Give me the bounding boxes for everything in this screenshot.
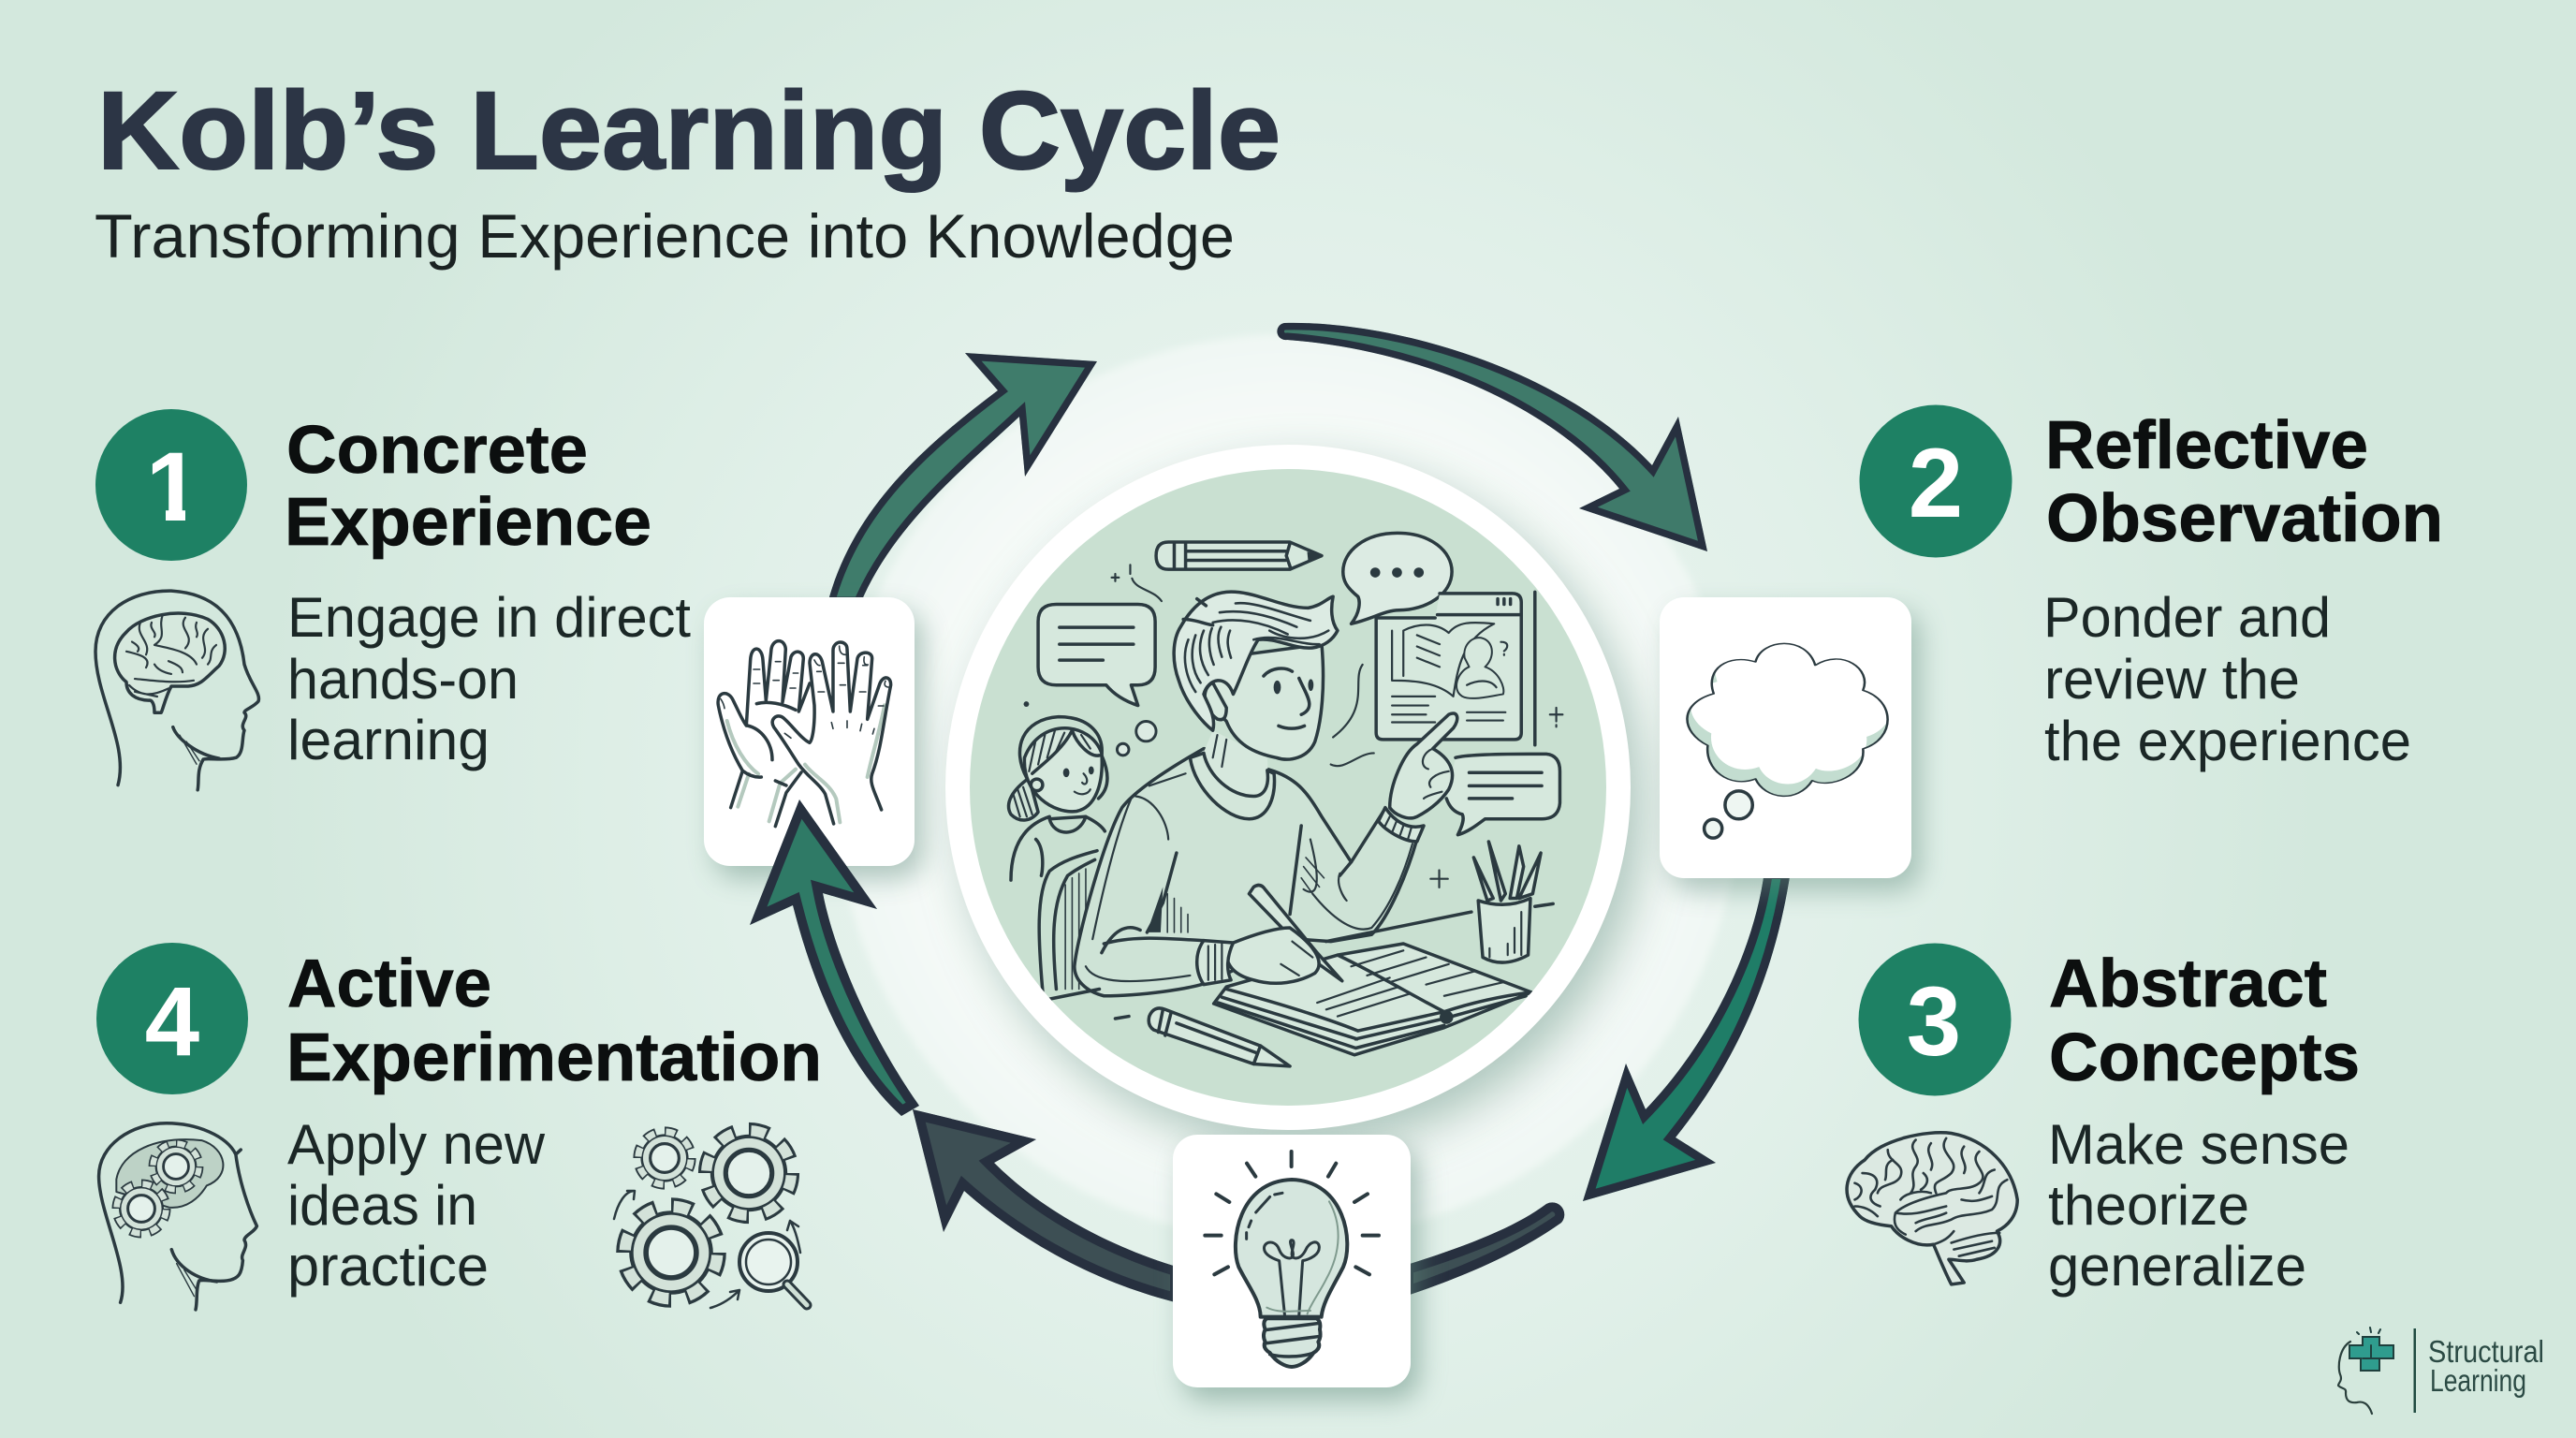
number badge 1: 1 [146, 433, 200, 542]
icon: gears and magnifier [614, 1131, 807, 1308]
speech bubble top [1343, 533, 1452, 624]
description 4: practice [287, 1235, 489, 1298]
icon: head with gears [99, 1123, 256, 1310]
arrow: experience up to concrete [827, 353, 1097, 604]
thought dots [1024, 701, 1156, 756]
step 4: active experimentation [96, 943, 822, 1310]
description 3: Make sense [2048, 1113, 2349, 1176]
logo divider [2413, 1328, 2416, 1413]
description 3: generalize [2048, 1235, 2306, 1298]
heading 4 [286, 946, 822, 1095]
icon: hands [718, 641, 891, 827]
heading 2 [2045, 408, 2443, 556]
icon: light bulb [1205, 1152, 1379, 1367]
description 2: review the [2044, 648, 2300, 711]
pencil bottom [1149, 1008, 1290, 1066]
collar [1190, 753, 1274, 819]
description 2 [2043, 586, 2411, 772]
number badge 2: 2 [1909, 429, 1963, 538]
step 3: abstract concepts [1847, 944, 2360, 1298]
arrow: reflective to abstract top arc [1277, 323, 1707, 551]
icon: head with brain [95, 591, 258, 790]
description 1 [287, 586, 691, 771]
step 1: concrete experience [95, 409, 691, 790]
heading 4: Active [287, 946, 491, 1021]
heading 1: Concrete [286, 413, 588, 488]
arrow: up into hands card base [913, 1109, 1179, 1303]
pencil top [1156, 542, 1322, 569]
green disc [970, 469, 1606, 1106]
speech bubble right [1446, 754, 1559, 835]
writing hand and pencil [1197, 885, 1342, 985]
number badge 2 [1859, 404, 2012, 558]
description 4 [287, 1113, 546, 1298]
central illustration [945, 445, 1631, 1130]
icon: thought cloud [1687, 632, 1891, 838]
pointing hand [1390, 713, 1457, 818]
heading 3: Abstract [2049, 946, 2327, 1021]
heading 1 [285, 413, 651, 560]
step 2: reflective observation [1859, 404, 2443, 772]
subtitle: Transforming Experience into Knowledge [95, 201, 1235, 271]
number badge 3: 3 [1907, 967, 1961, 1077]
description 4: Apply new [287, 1113, 546, 1176]
description 1: hands-on [287, 648, 519, 711]
soft white disc behind the cycle [835, 334, 1741, 1240]
book panel [1376, 592, 1535, 745]
number badge 3 [1859, 944, 2011, 1095]
icon: brain [1847, 1133, 2017, 1284]
girl [1009, 717, 1107, 880]
number badge 1 [95, 409, 247, 561]
open book [1214, 944, 1531, 1055]
description 3 [2048, 1113, 2349, 1298]
man [1075, 592, 1457, 996]
logo: Structural Learning [2338, 1328, 2544, 1414]
arrow: down to abstract concepts [1583, 871, 1791, 1201]
shadow of central circle [962, 466, 1644, 1148]
number badge 4 [96, 943, 248, 1094]
card: hands [704, 597, 924, 879]
title: Kolb’s Learning Cycle [97, 69, 1281, 193]
sparkle and squiggle [1112, 565, 1562, 888]
cuff [1379, 808, 1424, 842]
description 2: the experience [2044, 710, 2411, 772]
heading 3: Concepts [2049, 1020, 2360, 1095]
heading 1: Experience [285, 485, 651, 560]
arrow stub right of bulb [1404, 1202, 1564, 1297]
pencil cup [1473, 842, 1541, 962]
heading 2: Observation [2046, 481, 2443, 556]
face [1211, 644, 1324, 759]
eyes nose mouth [1274, 681, 1281, 694]
chair [1039, 851, 1097, 991]
heading 4: Experimentation [286, 1020, 822, 1095]
description 4: ideas in [287, 1174, 477, 1237]
logo text [2428, 1334, 2544, 1398]
card: light bulb [1173, 1135, 1420, 1401]
number badge 4: 4 [145, 967, 199, 1077]
neck [1202, 730, 1267, 797]
table lines [1043, 903, 1553, 1019]
description 1: learning [287, 709, 490, 771]
card: thought cloud [1660, 597, 1921, 891]
sweater [1075, 749, 1417, 996]
speech bubble left [1038, 604, 1155, 706]
description 2: Ponder and [2043, 586, 2331, 649]
white ring [945, 445, 1631, 1130]
description 3: theorize [2048, 1174, 2249, 1237]
logo text: Learning [2430, 1363, 2526, 1398]
logo text: Structural [2428, 1334, 2544, 1369]
description 1: Engage in direct [287, 586, 691, 649]
heading 2: Reflective [2045, 408, 2368, 483]
logo icon [2338, 1328, 2393, 1414]
heading 3 [2049, 946, 2360, 1095]
arrow: up to hands card [750, 800, 919, 1116]
ear [1205, 682, 1226, 720]
hair [1174, 592, 1338, 730]
